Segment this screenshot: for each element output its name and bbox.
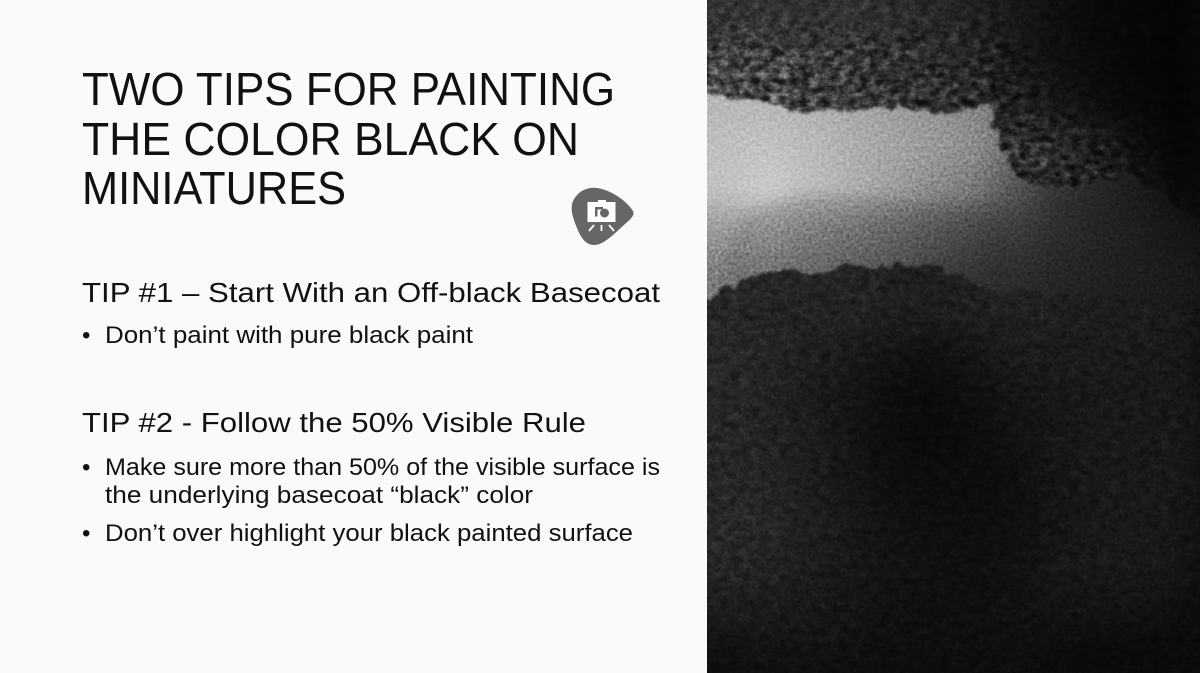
- heading: tip 1: TIP #1 – Start With an Off-black Basecoat: [82, 277, 660, 308]
- bullet: tip 1 point: Don’t paint with pure black paint: [105, 322, 473, 349]
- bullet: tip 2 second point: •: [82, 520, 90, 547]
- title: MINIATURES: [82, 162, 346, 214]
- icon: presentation easel in gray blob: [572, 188, 634, 245]
- panel: black watercolor texture image: [660, 0, 1200, 673]
- title: TWO TIPS FOR PAINTING: [82, 63, 615, 115]
- bullet: tip 2 first point: •: [82, 454, 90, 481]
- bullet: tip 1 point: •: [82, 322, 90, 349]
- title: THE COLOR BLACK ON: [82, 113, 579, 165]
- bullet: tip 2 second point: Don’t over highlight your black painted surface: [105, 520, 633, 547]
- panel: left background: [0, 0, 707, 673]
- bullet: tip 2 first point: the underlying basecoat “black” color: [105, 482, 533, 509]
- heading: tip 2: TIP #2 - Follow the 50% Visible Rule: [82, 407, 586, 438]
- bullet: tip 2 first point: Make sure more than 50% of the visible surface is: [105, 454, 660, 481]
